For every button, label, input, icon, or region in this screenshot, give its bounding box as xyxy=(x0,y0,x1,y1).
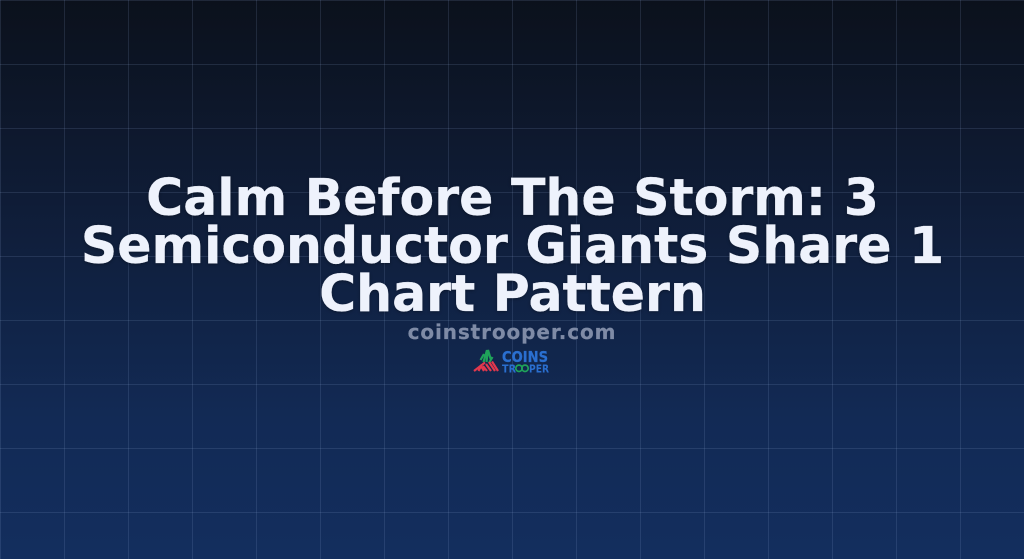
title xyxy=(81,168,944,323)
logo: coins trooper xyxy=(473,348,549,375)
title: Chart Pattern xyxy=(319,264,706,323)
title: Semiconductor Giants Share 1 xyxy=(81,216,944,275)
title: Calm Before The Storm: 3 xyxy=(146,168,879,226)
logo wordmark: trooper xyxy=(502,363,549,375)
logo wordmark: trooper: TR xyxy=(502,363,516,375)
icon: green and red chart peaks xyxy=(474,350,498,371)
logo wordmark: trooper: PER xyxy=(529,363,549,375)
website url: coinstrooper.com xyxy=(408,320,616,344)
logo wordmark: coins: COINS xyxy=(502,348,548,366)
